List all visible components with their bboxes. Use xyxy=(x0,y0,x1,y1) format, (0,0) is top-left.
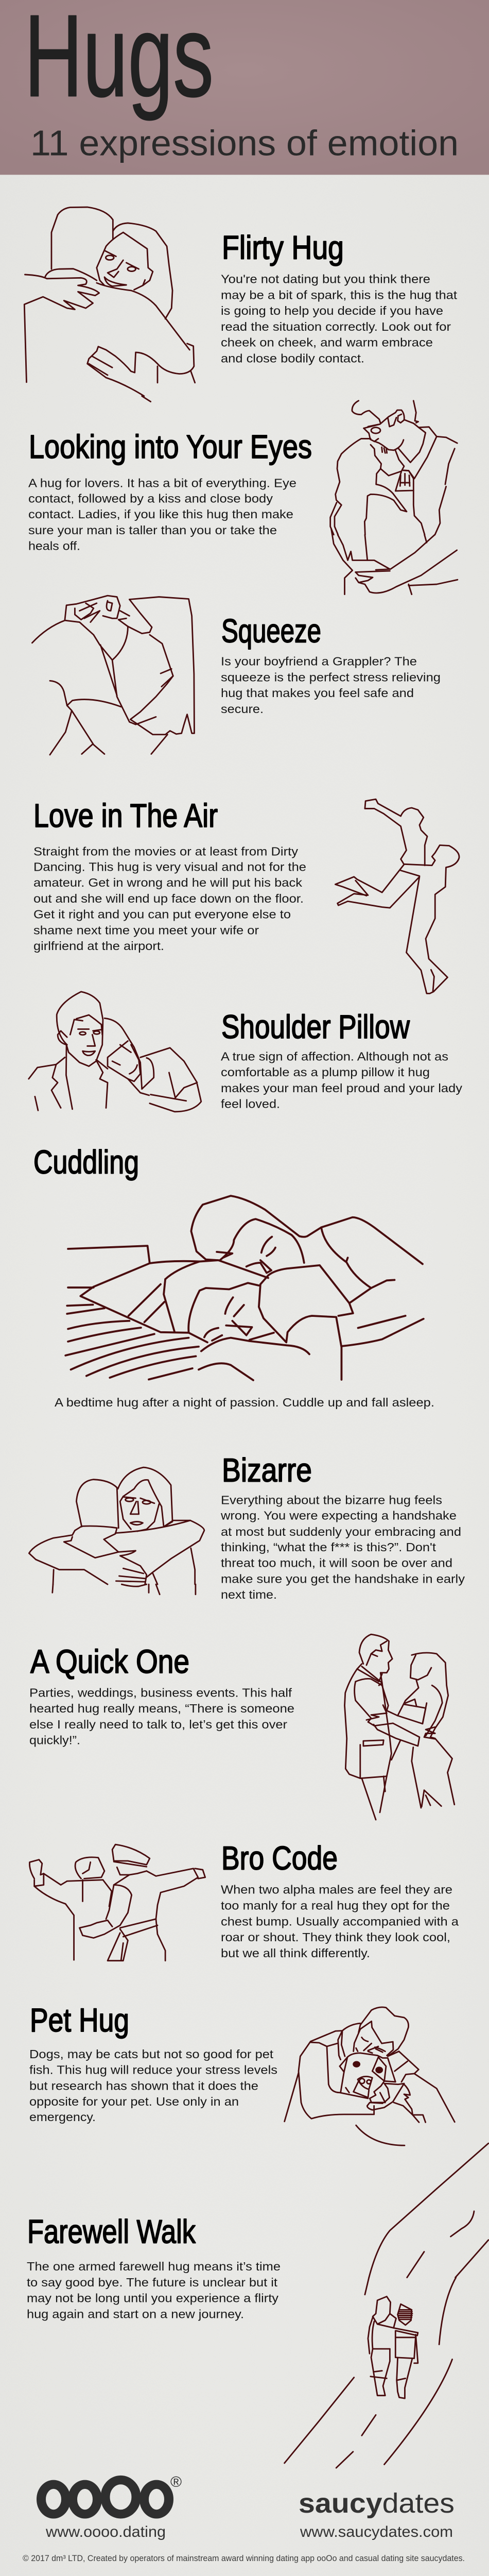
body text: quickly!”. xyxy=(29,1734,80,1747)
panel: flirty hug xyxy=(24,207,458,402)
panel: shoulder pillow xyxy=(29,992,462,1112)
body text: squeeze is the perfect stress relieving xyxy=(221,671,441,684)
body text: may not be long until you experience a flirty xyxy=(27,2292,278,2304)
body text xyxy=(33,845,306,953)
body text: makes your man feel proud and your lady xyxy=(221,1081,462,1095)
body text: but we all think differently. xyxy=(221,1946,370,1960)
heading: Bro Code xyxy=(221,1840,338,1876)
body text xyxy=(29,2047,277,2124)
body text xyxy=(29,1686,294,1747)
body text: girlfriend at the airport. xyxy=(33,940,164,953)
illustration: kissing couple xyxy=(330,401,458,595)
header banner xyxy=(0,0,489,175)
body text: Everything about the bizarre hug feels xyxy=(221,1494,442,1506)
body text: emergency. xyxy=(29,2110,96,2124)
illustration: half-hearted embrace xyxy=(345,1634,455,1820)
panel: bro code xyxy=(29,1840,459,1961)
body text: else I really need to talk to, let’s get this over xyxy=(29,1718,287,1731)
body text: When two alpha males are feel they are xyxy=(221,1883,452,1896)
heading: A Quick One xyxy=(30,1643,189,1680)
heading: Cuddling xyxy=(33,1144,139,1180)
body text: make sure you get the handshake in early xyxy=(221,1572,465,1585)
body text: out and she will end up face down on the floor. xyxy=(33,892,304,905)
heading: Pet Hug xyxy=(30,2002,129,2039)
body text: A true sign of affection. Although not as xyxy=(221,1050,448,1063)
body text: sure your man is taller than you or take the xyxy=(28,523,277,537)
illustration: head on shoulder xyxy=(29,992,201,1112)
heading: Bizarre xyxy=(222,1451,312,1488)
body text: hug again and start on a new journey. xyxy=(27,2308,244,2320)
caption: A bedtime hug after a night of passion. Cuddle up and fall asleep. xyxy=(55,1396,434,1409)
panel: cuddling xyxy=(33,1144,434,1409)
footer xyxy=(23,2474,465,2563)
heading: Squeeze xyxy=(221,613,321,649)
body text: at most but suddenly your embracing and xyxy=(221,1525,461,1538)
body text: is going to help you decide if you have xyxy=(221,304,443,317)
saucydates url: www.saucydates.com xyxy=(300,2523,453,2540)
body text xyxy=(221,273,458,365)
body text: hug that makes you feel safe and xyxy=(221,686,414,700)
body text xyxy=(221,1883,459,1960)
panel: love in the air xyxy=(33,797,459,993)
body text: fish. This hug will reduce your stress levels xyxy=(29,2063,277,2076)
body text xyxy=(28,477,296,553)
body text: hearted hug really means, “There is someone xyxy=(29,1702,294,1715)
copyright: © 2017 dm³ LTD, Created by operators of mainstream award winning dating app ooOo and casual dating site saucydates. xyxy=(23,2553,465,2563)
body text: Is your boyfriend a Grappler? The xyxy=(221,655,417,668)
body text: Parties, weddings, business events. This half xyxy=(29,1686,292,1699)
panel: a quick one xyxy=(29,1634,455,1820)
body text: too manly for a real hug they opt for the xyxy=(221,1899,450,1912)
body text: but research has shown that it does the xyxy=(29,2079,258,2092)
body text: and close bodily contact. xyxy=(221,352,364,365)
heading: Shoulder Pillow xyxy=(221,1008,410,1045)
heading: Love in The Air xyxy=(33,797,218,834)
illustration: dance lift xyxy=(335,799,459,993)
heading: Farewell Walk xyxy=(27,2213,196,2250)
body text: cheek on cheek, and warm embrace xyxy=(221,336,433,349)
panel: looking into your eyes xyxy=(28,401,458,595)
body text: wrong. You were expecting a handshake xyxy=(220,1509,457,1522)
body text: roar or shout. They think they look cool, xyxy=(221,1930,450,1944)
body text xyxy=(221,1050,462,1111)
body text: contact, followed by a kiss and close body xyxy=(28,492,273,505)
body text: Dogs, may be cats but not so good for pet xyxy=(29,2047,273,2061)
registered mark: ® xyxy=(170,2474,182,2490)
panel: bizarre xyxy=(29,1451,465,1601)
body text xyxy=(221,655,441,716)
logo: saucydates: saucydates xyxy=(299,2487,455,2519)
illustration: chest bump xyxy=(29,1844,205,1961)
body text: threat too much, it will soon be over and xyxy=(221,1556,452,1569)
body text xyxy=(220,1494,465,1601)
body text: secure. xyxy=(221,702,264,716)
body text: may be a bit of spark, this is the hug that xyxy=(221,289,458,301)
panel: farewell walk xyxy=(27,2143,488,2468)
body text: Dancing. This hug is very visual and not for the xyxy=(33,860,306,873)
body text: You're not dating but you think there xyxy=(221,273,430,286)
body text: shame next time you meet your wife or xyxy=(33,924,259,937)
body text xyxy=(27,2260,281,2320)
panel: squeeze xyxy=(32,596,441,755)
body text: feel loved. xyxy=(221,1097,280,1111)
body text: chest bump. Usually accompanied with a xyxy=(221,1915,459,1928)
body text: Straight from the movies or at least from Dirty xyxy=(33,845,298,858)
illustration: couple walking down a road xyxy=(285,2143,488,2468)
body text: read the situation correctly. Look out for xyxy=(221,320,451,333)
body text: Get it right and you can put everyone else to xyxy=(33,908,291,921)
body text: to say good bye. The future is unclear but it xyxy=(27,2276,277,2289)
body text: next time. xyxy=(221,1588,277,1601)
illustration: cuddling in bed xyxy=(65,1196,424,1380)
illustration: hugging a dog xyxy=(285,2007,455,2145)
body text: heals off. xyxy=(28,539,80,553)
logo: ooOo xyxy=(41,2480,169,2514)
oooo url: www.oooo.dating xyxy=(45,2523,166,2540)
heading: Looking into Your Eyes xyxy=(29,428,312,465)
body text: The one armed farewell hug means it’s time xyxy=(27,2260,281,2273)
body text: contact. Ladies, if you like this hug then make xyxy=(28,508,293,521)
illustration: squeeze couple xyxy=(32,596,194,755)
illustration: flirty hug couple xyxy=(24,207,195,402)
body text: A hug for lovers. It has a bit of everything. Eye xyxy=(28,477,296,490)
body text: amateur. Get in wrong and he will put his back xyxy=(33,876,302,889)
body text: thinking, “what the f*** is this?”. Don't xyxy=(221,1540,436,1554)
body text: opposite for your pet. Use only in an xyxy=(29,2095,239,2108)
subtitle: 11 expressions of emotion xyxy=(30,123,459,163)
panel: pet hug xyxy=(29,2002,455,2145)
illustration: awkward hug xyxy=(29,1467,204,1595)
body text: comfortable as a plump pillow it hug xyxy=(221,1066,430,1079)
heading: Flirty Hug xyxy=(222,229,344,266)
